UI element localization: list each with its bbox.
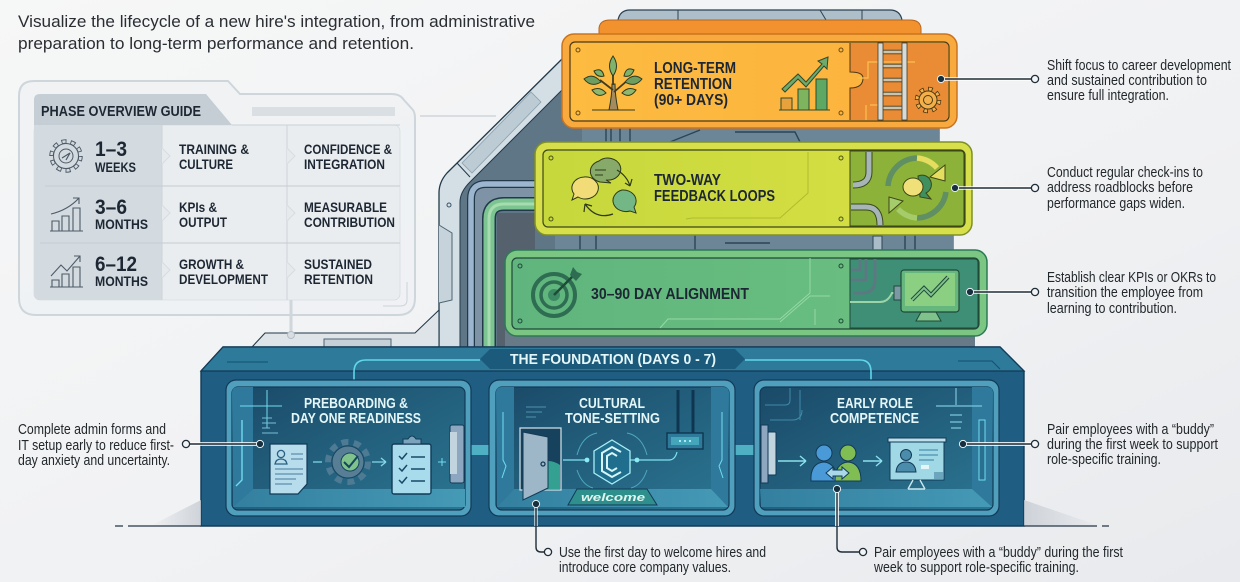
back plate above foundation [252,310,439,348]
panel: foundation [201,347,1024,526]
callout: long-term retention: ensure full integration. [1047,87,1169,104]
row: growth and development [179,256,268,287]
heading: preboarding [291,395,421,427]
callout: long-term retention [937,57,1232,104]
panel: 30-90 day alignment card [505,250,987,336]
heading: preboarding: DAY ONE READINESS [291,410,421,427]
callout: feedback loops: address roadblocks before [1047,179,1193,196]
intro text [18,12,535,53]
row: measurable contribution [304,199,395,230]
icon: monitor with trend line [894,270,959,321]
connector: panel to foundation [288,300,294,338]
callout: alignment [966,269,1216,317]
heading: two-way feedback loops: FEEDBACK LOOPS [654,188,775,205]
row: measurable contribution: MEASURABLE [304,199,387,215]
callout: preboarding: IT setup early to reduce first- [18,437,174,454]
heading: early role competence: COMPETENCE [830,410,919,427]
panel: long-term retention card [562,34,957,128]
heading: long-term retention: RETENTION [654,76,732,93]
room: cultural tone-setting [489,380,735,516]
icon: document [270,444,307,494]
row: training and culture: CULTURE [179,156,233,172]
pillar left [761,425,882,483]
row: 3-6 months: 3–6 [95,196,127,219]
row: confidence and integration: CONFIDENCE & [304,141,392,157]
heading: cultural tone-setting: CULTURAL [579,395,645,412]
row: 1-3 weeks: WEEKS [95,160,136,175]
heading: preboarding: PREBOARDING & [304,395,408,412]
pillar right [438,425,464,483]
callout: early role right [959,421,1219,468]
callout: preboarding: Complete admin forms and [18,421,166,438]
row: 6-12 months [95,253,148,289]
icon: bar chart with zigzag [50,256,83,287]
heading: early role competence [830,395,919,427]
callout: feedback loops [951,164,1203,212]
row: 3-6 months [95,196,148,232]
callout: feedback loops: Conduct regular check-ins to [1047,164,1203,181]
icon: clipboard checklist [392,436,431,494]
heading: 30-90 day alignment: 30–90 DAY ALIGNMENT [591,286,749,303]
row: sustained retention [304,256,373,287]
row: kpis and output [179,199,227,230]
connector: panel to tower [420,115,496,117]
panel: two-way feedback card [535,142,972,235]
icon: growth tree [584,56,642,110]
callout: feedback loops: performance gaps widen. [1047,195,1185,212]
ground lines and shadows [115,500,1109,526]
icon: feedback loop arrows [888,158,946,218]
icon: presentation board [888,438,946,489]
icon: bar chart up [50,198,83,231]
welcome mat [568,489,657,505]
icon: two people buddy pair [811,445,861,481]
row: measurable contribution: CONTRIBUTION [304,214,395,230]
callout: cultural tone-setting: introduce core company values. [559,559,731,576]
icon: chat bubbles [572,158,636,216]
callout: cultural tone-setting: Use the first day to welcome hires and [559,544,766,561]
icon: bar chart with arrow [779,57,830,110]
heading: cultural tone-setting: TONE-SETTING [565,410,660,427]
callout: alignment: transition the employee from [1047,284,1203,301]
icon: open door [520,428,561,500]
icon: gear [917,89,939,111]
row: 1-3 weeks [95,138,136,175]
welcome mat: welcome [581,492,645,504]
heading: two-way feedback loops [654,172,775,205]
panel title: PHASE OVERVIEW GUIDE [41,104,201,120]
callout: long-term retention: and sustained contribution to [1047,72,1207,89]
row: 6-12 months: MONTHS [95,274,148,289]
row: 1-3 weeks: 1–3 [95,138,127,161]
callout: early role bottom: Pair employees with a “buddy” during the first [874,544,1124,561]
callout: early role bottom [833,485,1124,576]
icon: target with arrow [533,267,582,316]
callout: preboarding: day anxiety and uncertainty. [18,452,170,469]
row: growth and development: GROWTH & [179,256,244,272]
row: 3-6 months: MONTHS [95,217,148,232]
panel: orange top strip [599,20,921,34]
row: growth and development: DEVELOPMENT [179,271,268,287]
heading: long-term retention: LONG-TERM [654,60,736,77]
connector pipes between rooms [471,445,754,455]
callout: early role bottom: week to support role-specific training. [873,559,1079,576]
intro text: Visualize the lifecycle of a new hire's integration, from administrative [18,12,535,31]
icon: gear with check [313,442,386,482]
icon: wall panel [667,390,703,449]
row: 6-12 months: 6–12 [95,253,137,276]
heading: two-way feedback loops: TWO-WAY [654,172,721,189]
heading: long-term retention: (90+ DAYS) [654,92,728,109]
callout: alignment: learning to contribution. [1047,300,1177,317]
icon: gear [52,142,80,170]
tab: the foundation heading: THE FOUNDATION (DAYS 0 - 7) [510,351,716,368]
pipes on two-way card [851,152,880,225]
icon: company hexagon logo [563,433,677,488]
room: early role competence [754,380,999,516]
intro text: preparation to long-term performance and retention. [18,34,414,53]
panel: phase overview guide [19,81,415,315]
callout: preboarding [18,421,264,469]
row: sustained retention: SUSTAINED [304,256,372,272]
callout: early role right: role-specific training. [1047,451,1161,468]
room: preboarding [226,380,471,516]
row: training and culture [179,141,249,172]
row: sustained retention: RETENTION [304,271,373,287]
icon: ladder [878,43,907,120]
row: kpis and output: OUTPUT [179,214,227,230]
callout: cultural tone-setting [532,500,766,576]
row: kpis and output: KPIs & [179,199,217,215]
heading: cultural tone-setting [565,395,660,427]
row: confidence and integration: INTEGRATION [304,156,385,172]
row: training and culture: TRAINING & [179,141,249,157]
heading: early role competence: EARLY ROLE [837,395,913,412]
pipes on alignment card [851,259,875,293]
row: confidence and integration [304,141,392,172]
heading: long-term retention [654,60,736,109]
tower structure behind the cards [439,10,975,348]
